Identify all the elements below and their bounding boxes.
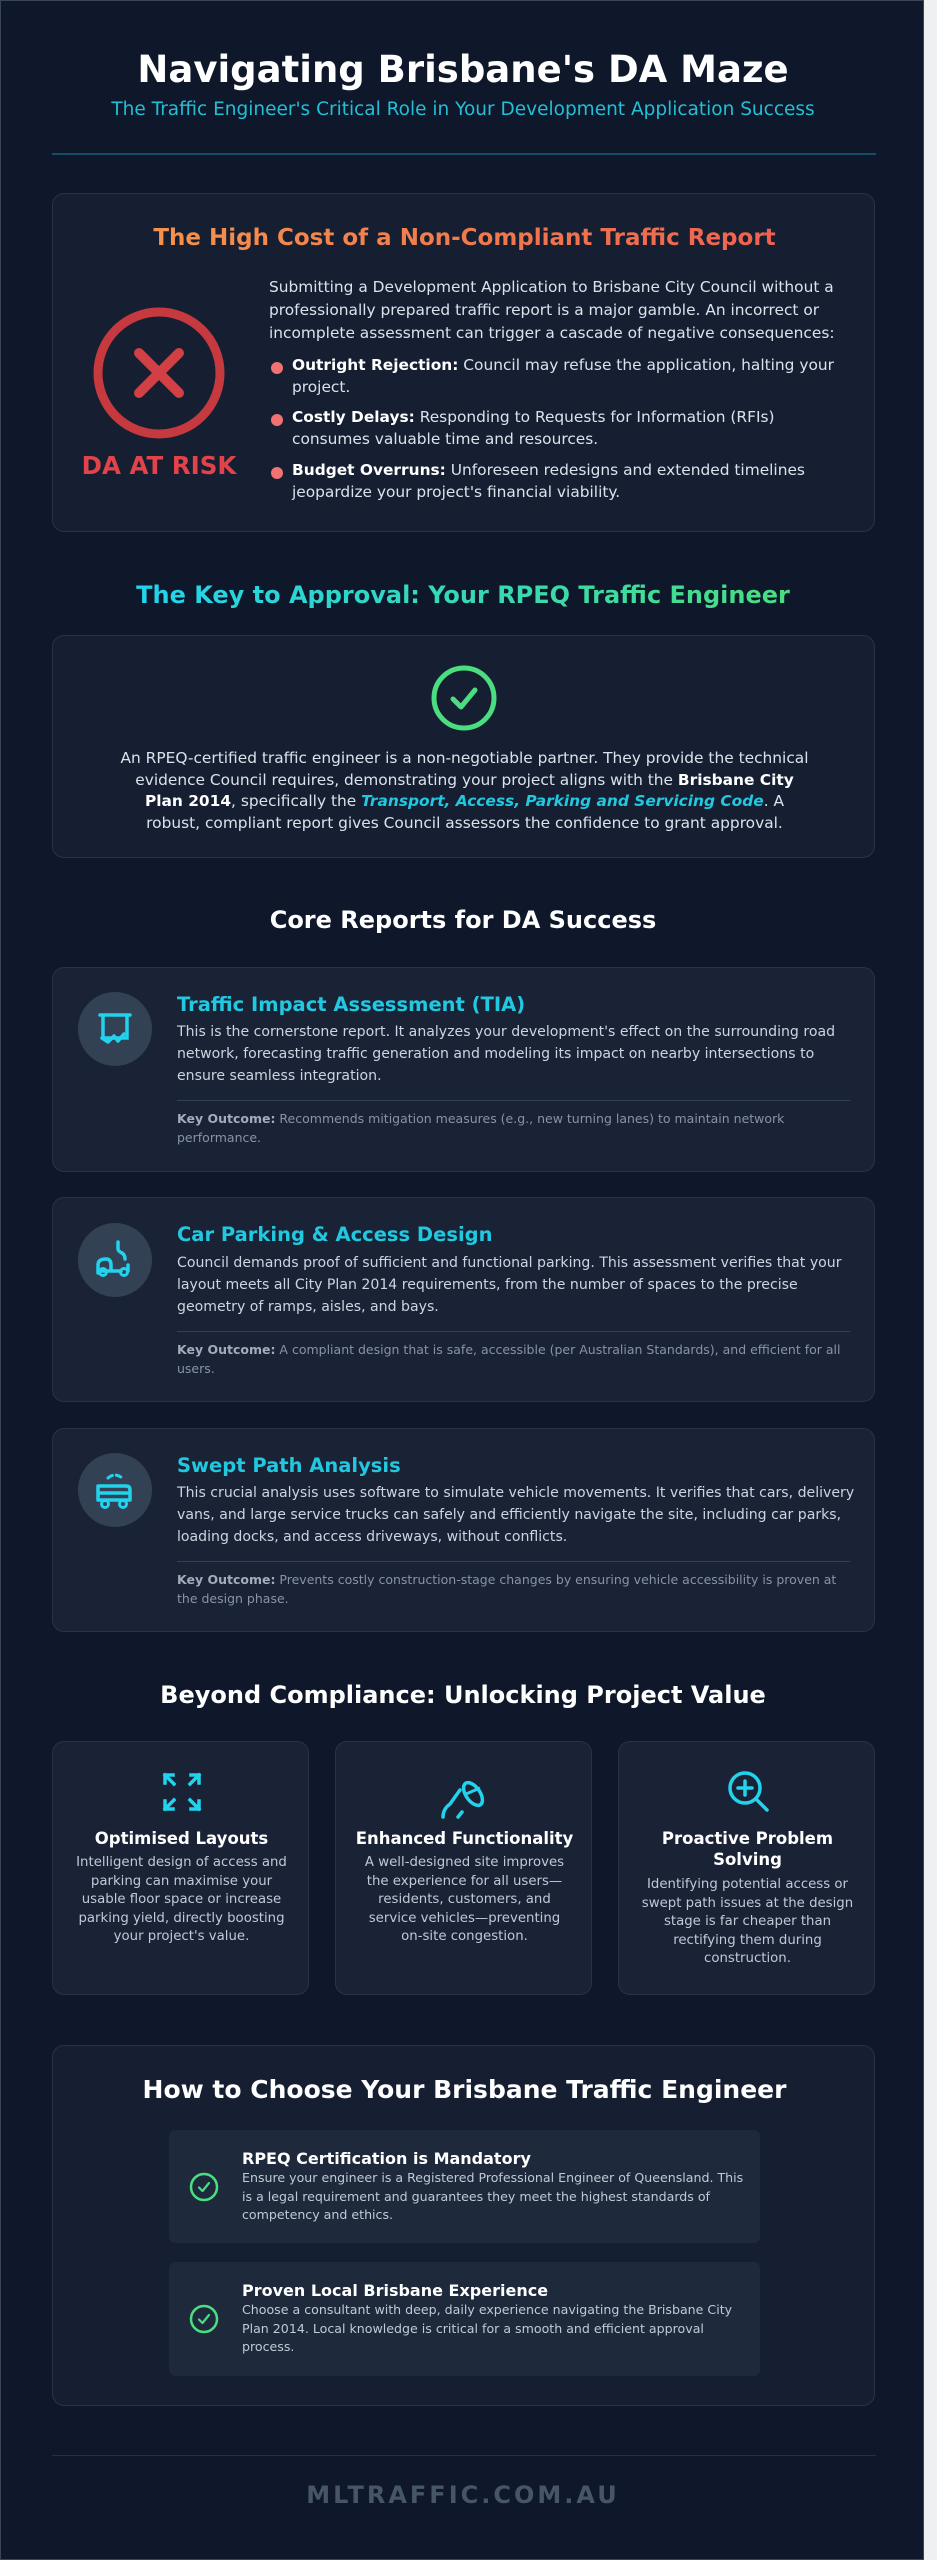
icon: magnifier plus [728,1771,769,1812]
heading: key to approval: The Key to Approval: Your RPEQ Traffic Engineer [136,581,790,609]
icon: X circle [94,308,224,438]
text: proactive problem solving: Identifying potential access or swept path issues at the design stage is far cheaper than rectifying them during construction. [642,1877,853,1966]
text: parking key outcome: Key Outcome: A compliant design that is safe, accessible (per Australian Standards), and efficient for all users. [177,1342,840,1376]
text: TIA body: This is the cornerstone report. It analyzes your development's effect on the surrounding road network, forecasting traffic generation and modeling its impact on nearby intersections to ensure seamless integration. [177,1024,835,1084]
panel: how to choose [52,2045,875,2406]
card: optimised layouts [52,1741,309,1995]
text: enhanced functionality: A well-designed site improves the experience for all users—residents, customers, and service vehicles—preventing on-site congestion. [365,1855,564,1944]
icon: check circle [432,666,496,730]
icon: TIA [78,992,152,1066]
card: swept path [52,1428,875,1632]
heading: beyond compliance: Beyond Compliance: Unlocking Project Value [160,1681,766,1709]
icon: check [190,2172,218,2202]
item: RPEQ mandatory [169,2130,760,2243]
bullet: delays: Costly Delays: Responding to Requests for Information (RFIs) consumes valuable time and resources. [292,408,775,448]
text: swept path key outcome: Key Outcome: Prevents costly construction-stage changes by ensuring vehicle accessibility is proven at the design phase. [177,1572,836,1606]
card: parking [52,1197,875,1402]
icon: bandage [441,1780,484,1819]
icon: parking [78,1223,152,1297]
title: Navigating Brisbane's DA Maze [137,48,789,91]
bullet: budget: Budget Overruns: Unforeseen redesigns and extended timelines jeopardize your project's financial viability. [292,461,805,501]
icon: check [190,2304,218,2334]
text: intro: Submitting a Development Application to Brisbane City Council without a professionally prepared traffic report is a major gamble. An incorrect or incomplete assessment can trigger a cascade of negative consequences: [269,278,835,342]
title: local experience: Proven Local Brisbane Experience [242,2281,548,2300]
panel: RPEQ [52,635,875,858]
icon: truck [78,1453,152,1527]
title: parking: Car Parking & Access Design [177,1223,492,1246]
text: local experience: Choose a consultant with deep, daily experience navigating the Brisbane City Plan 2014. Local knowledge is critical for a smooth and efficient approval process. [242,2302,732,2354]
item: local experience [169,2262,760,2376]
panel: high cost [52,193,875,532]
footer: MLTRAFFIC.COM.AU [306,2481,620,2509]
title: TIA: Traffic Impact Assessment (TIA) [177,993,525,1016]
icon: expand arrows [162,1772,202,1812]
heading: high cost [53,223,876,253]
text: swept path body: This crucial analysis uses software to simulate vehicle movements. It verifies that cars, delivery vans, and large service trucks can safely and efficiently navigate the site, including car parks, loading docks, and access driveways, without conflicts. [177,1485,854,1545]
card: proactive problem solving [618,1741,875,1995]
title: RPEQ: RPEQ Certification is Mandatory [242,2149,531,2168]
text: RPEQ: Ensure your engineer is a Registered Professional Engineer of Queensland. This is a legal requirement and guarantees they meet the highest standards of competency and ethics. [242,2170,743,2222]
card: TIA [52,967,875,1172]
title: proactive problem solving: Proactive Problem Solving [662,1829,833,1869]
title: enhanced functionality: Enhanced Functionality [356,1829,573,1848]
text: RPEQ description: An RPEQ-certified traffic engineer is a non-negotiable partner. They provide the technical evidence Council requires, demonstrating your project aligns with the Brisbane City Plan 2014, specifically the Transport, Access, Parking and Servicing Code. A robust, compliant report gives Council assessors the confidence to grant approval. [120,749,808,832]
text: optimised layouts: Intelligent design of access and parking can maximise your usable floor space or increase parking yield, directly boosting your project's value. [76,1855,287,1944]
text: parking body: Council demands proof of sufficient and functional parking. This assessment verifies that your layout meets all City Plan 2014 requirements, from the number of spaces to the precise geometry of ramps, aisles, and bays. [177,1255,842,1315]
heading: how to choose: How to Choose Your Brisbane Traffic Engineer [143,2075,786,2104]
title: optimised layouts: Optimised Layouts [95,1829,268,1848]
subtitle: The Traffic Engineer's Critical Role in Your Development Application Success [111,99,815,120]
card: enhanced functionality [335,1741,592,1995]
label: DA AT RISK: DA AT RISK [82,451,236,480]
heading: core reports: Core Reports for DA Success [270,906,656,934]
bullet: rejection: Outright Rejection: Council may refuse the application, halting your project. [292,356,834,396]
title: swept path: Swept Path Analysis [177,1454,401,1477]
text: TIA key outcome: Key Outcome: Recommends mitigation measures (e.g., new turning lanes) to maintain network performance. [177,1111,784,1145]
